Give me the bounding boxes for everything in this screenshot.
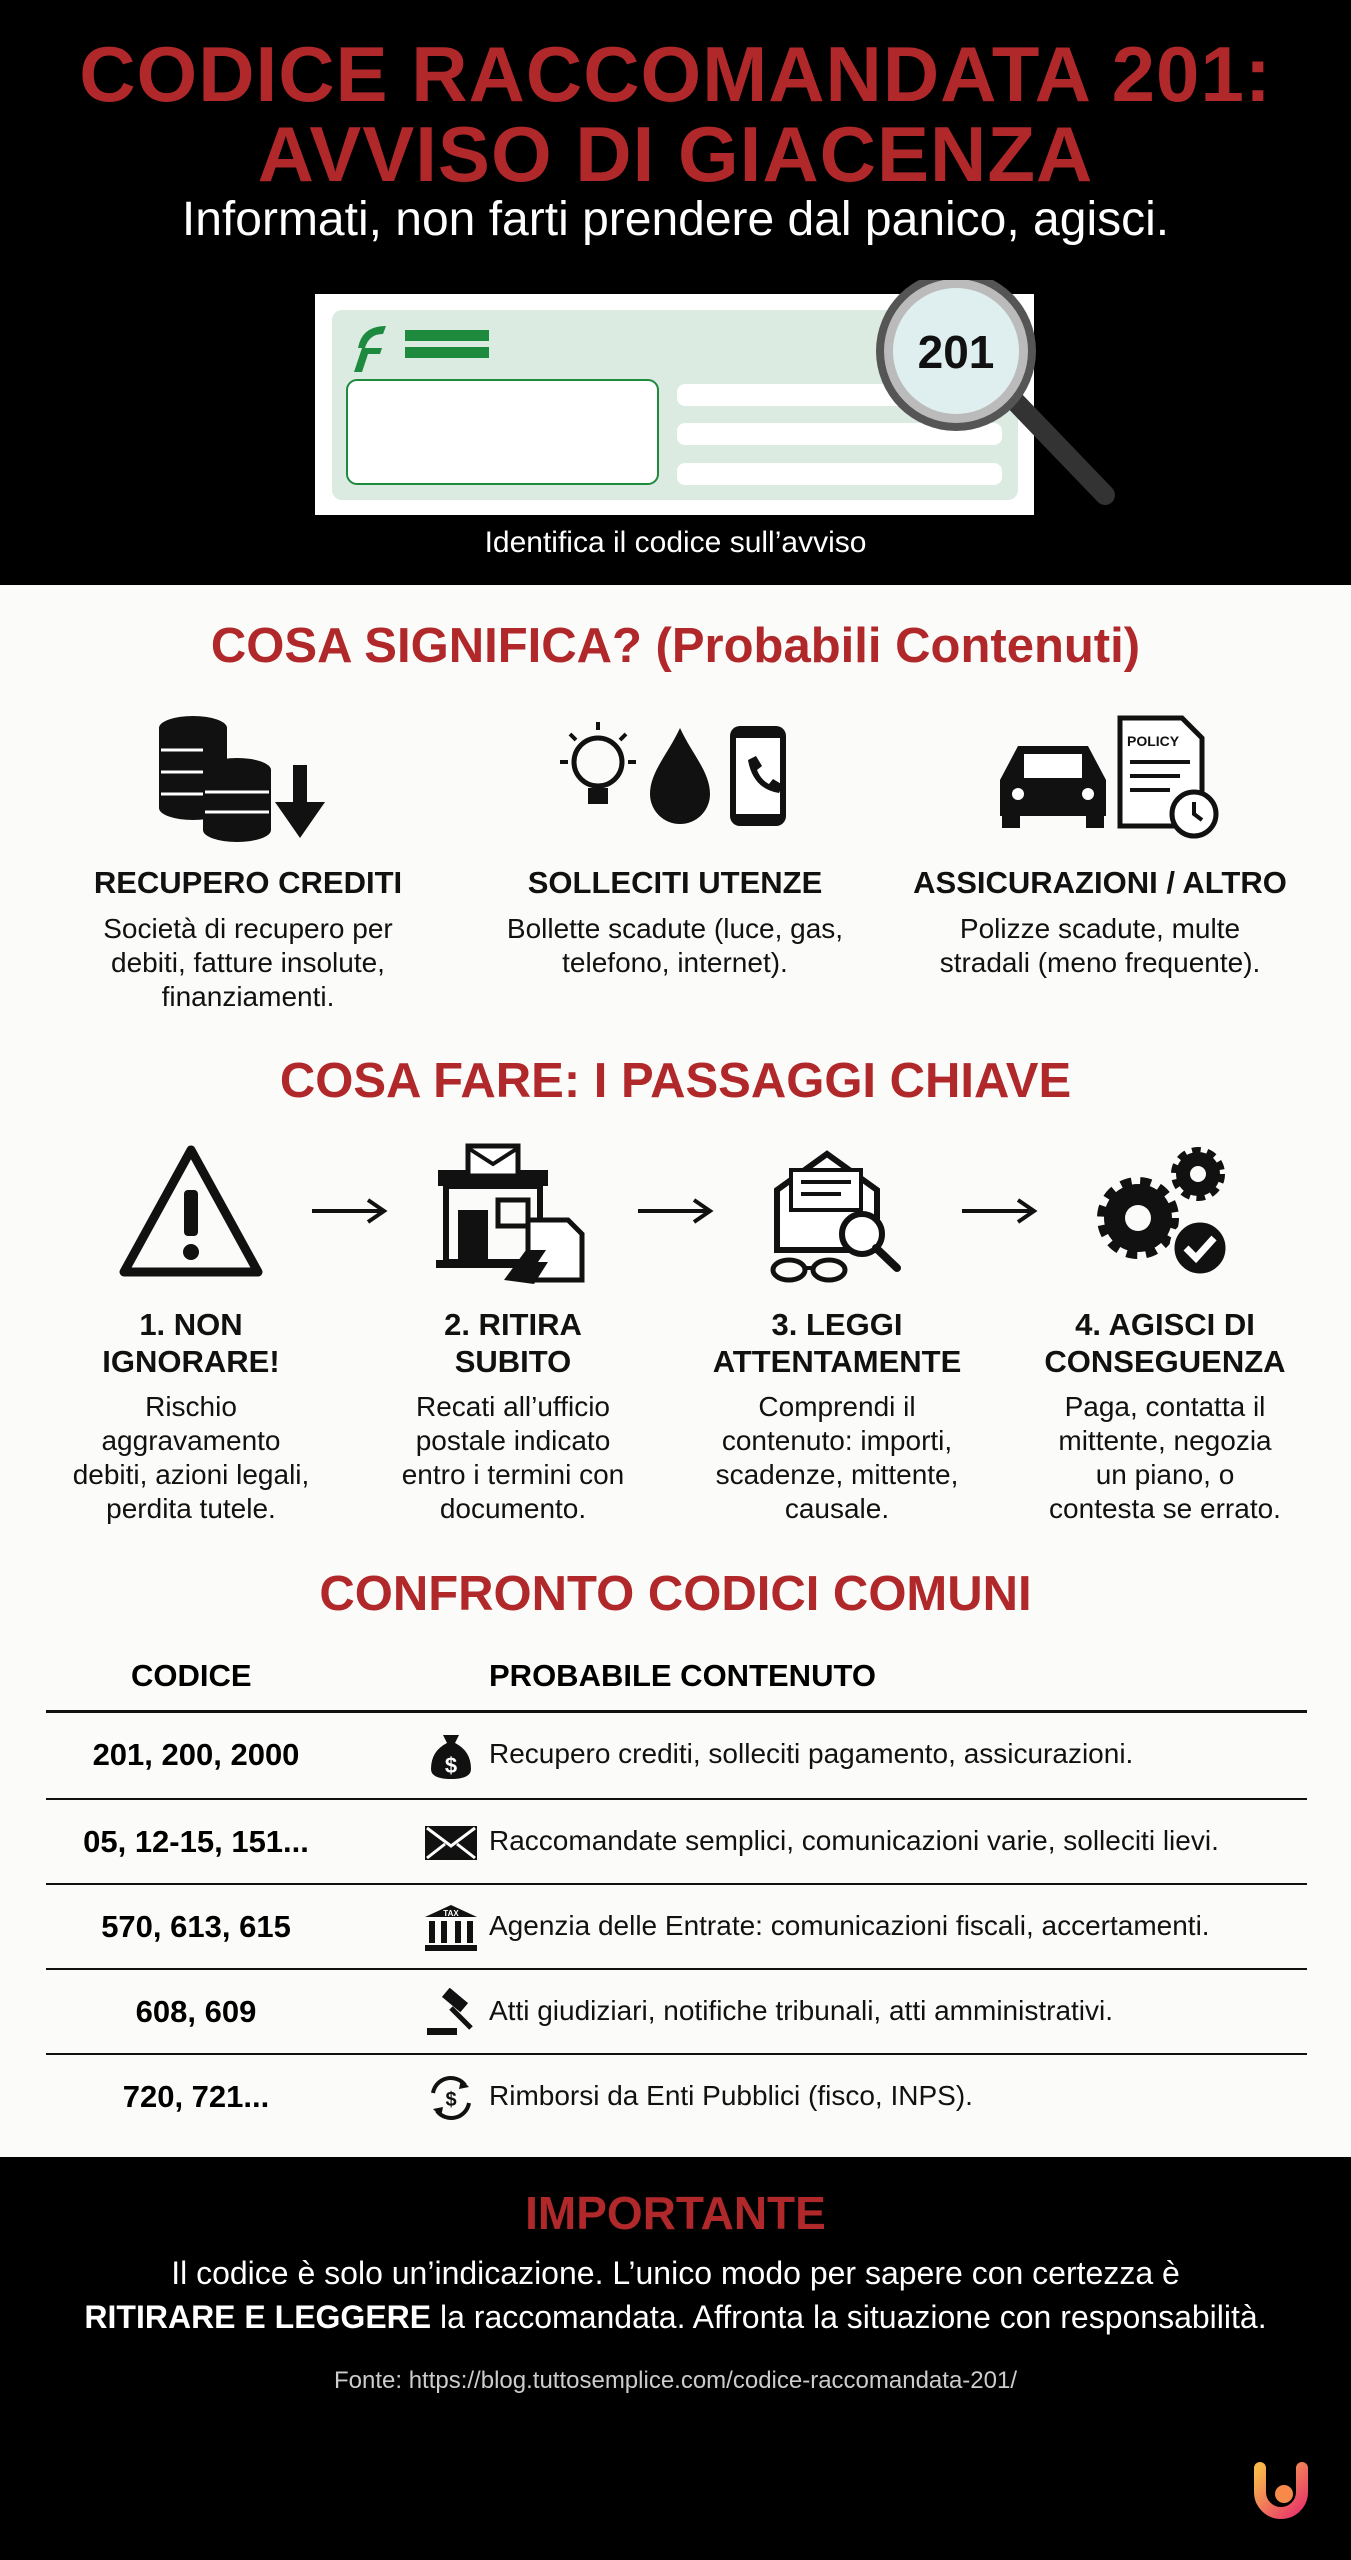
- icon: bulb drop phone: [560, 722, 786, 826]
- description: Società di recupero per: [103, 913, 393, 944]
- description: telefono, internet).: [562, 947, 788, 978]
- step 4: [1044, 1147, 1286, 1524]
- step 3: [713, 1150, 961, 1524]
- description: [103, 913, 393, 1012]
- icon: coins: [159, 716, 325, 842]
- heading: SOLLECITI UTENZE: [528, 865, 822, 900]
- heading: importante: IMPORTANTE: [525, 2187, 826, 2239]
- description: scadenze, mittente,: [716, 1459, 958, 1490]
- row 3: Agenzia delle Entrate: comunicazioni fiscali, accertamenti.: [489, 1910, 1210, 1941]
- caption: Identifica il codice sull’avviso: [485, 526, 866, 559]
- description: contenuto: importi,: [722, 1425, 952, 1456]
- description: Polizze scadute, multe: [960, 913, 1240, 944]
- row 3: 570, 613, 615: [101, 1909, 291, 1944]
- row 4: 608, 609: [136, 1994, 256, 2029]
- icon: gears check: [1097, 1147, 1226, 1274]
- description: Comprendi il: [758, 1391, 916, 1422]
- description: postale indicato: [416, 1425, 610, 1456]
- description: documento.: [440, 1493, 586, 1524]
- title: 1. NON: [139, 1307, 243, 1342]
- row 2: [46, 1798, 1307, 1883]
- heading: RECUPERO CREDITI: [94, 865, 402, 900]
- title: [79, 30, 1272, 198]
- description: finanziamenti.: [162, 981, 334, 1012]
- important text: Il codice è solo un’indicazione. L’unico modo per sapere con certezza è: [171, 2255, 1180, 2291]
- source: Fonte: https://blog.tuttosemplice.com/codice-raccomandata-201/: [334, 2367, 1017, 2394]
- row 2: 05, 12-15, 151...: [83, 1824, 309, 1859]
- row 3: TAX: [443, 1909, 459, 1918]
- title: CONSEGUENZA: [1044, 1344, 1286, 1379]
- illustration: notice card with magnifier: 201: [918, 326, 994, 378]
- title: [102, 1307, 280, 1379]
- heading: cosa fare: COSA FARE: I PASSAGGI CHIAVE: [280, 1054, 1071, 1108]
- row 1: $: [445, 1753, 457, 1778]
- table: [46, 1658, 1307, 2120]
- step 2: [402, 1144, 624, 1524]
- title: IGNORARE!: [102, 1344, 280, 1379]
- description: causale.: [785, 1493, 889, 1524]
- logo: [1254, 2462, 1308, 2519]
- description: Bollette scadute (luce, gas,: [507, 913, 843, 944]
- icon: post office: [436, 1144, 584, 1284]
- arrow: [312, 1198, 388, 1224]
- row 2: Raccomandate semplici, comunicazioni varie, solleciti lievi.: [489, 1825, 1219, 1856]
- row 1: 201, 200, 2000: [93, 1737, 299, 1772]
- arrow: [638, 1198, 714, 1224]
- description: [73, 1391, 309, 1524]
- title: 4. AGISCI DI: [1075, 1307, 1255, 1342]
- row 5: Rimborsi da Enti Pubblici (fisco, INPS).: [489, 2080, 973, 2111]
- subtitle: Informati, non farti prendere dal panico, agisci.: [182, 193, 1169, 246]
- title: ATTENTAMENTE: [713, 1344, 961, 1379]
- description: aggravamento: [101, 1425, 280, 1456]
- icon: warning: [120, 1146, 262, 1276]
- title: [444, 1307, 582, 1379]
- title: [713, 1307, 961, 1379]
- arrow: [962, 1198, 1038, 1224]
- description: debiti, fatture insolute,: [111, 947, 385, 978]
- description: stradali (meno frequente).: [940, 947, 1260, 978]
- title: 3. LEGGI: [772, 1307, 902, 1342]
- description: Paga, contatta il: [1065, 1391, 1265, 1422]
- panel: recupero crediti: [94, 716, 402, 1012]
- title: [1044, 1307, 1286, 1379]
- row 1: Recupero crediti, solleciti pagamento, assicurazioni.: [489, 1738, 1133, 1769]
- heading: ASSICURAZIONI / ALTRO: [913, 865, 1287, 900]
- table header: [131, 1658, 876, 1693]
- description: [402, 1391, 624, 1524]
- description: mittente, negozia: [1058, 1425, 1272, 1456]
- important text: RITIRARE E LEGGERE la raccomandata. Affronta la situazione con responsabilità.: [84, 2299, 1267, 2335]
- header panel: [0, 0, 1351, 585]
- heading: cosa significa: COSA SIGNIFICA? (Probabili Contenuti): [211, 619, 1140, 673]
- magnifier: [1010, 396, 1105, 495]
- description: [940, 913, 1260, 978]
- table header: PROBABILE CONTENUTO: [489, 1658, 876, 1693]
- important text: [84, 2255, 1267, 2335]
- icon: envelope magnifier glasses: [770, 1150, 901, 1282]
- row 1: [93, 1735, 1133, 1779]
- description: entro i termini con: [402, 1459, 624, 1490]
- panel: assicurazioni: [913, 716, 1287, 978]
- panel: solleciti utenze: [507, 722, 843, 978]
- description: contesta se errato.: [1049, 1493, 1281, 1524]
- description: [716, 1391, 958, 1524]
- description: debiti, azioni legali,: [73, 1459, 309, 1490]
- description: [1049, 1391, 1281, 1524]
- row 5: $: [445, 2089, 457, 2111]
- step 1: [73, 1146, 309, 1524]
- row 5: 720, 721...: [123, 2079, 269, 2114]
- description: un piano, o: [1096, 1459, 1234, 1490]
- heading: confronto: CONFRONTO CODICI COMUNI: [319, 1567, 1032, 1621]
- illustration: notice card with magnifier: [315, 280, 1115, 515]
- description: Rischio: [145, 1391, 237, 1422]
- row 4: [46, 1968, 1307, 2053]
- row 3: [46, 1883, 1307, 1968]
- row 4: Atti giudiziari, notifiche tribunali, atti amministrativi.: [489, 1995, 1113, 2026]
- description: perdita tutele.: [106, 1493, 276, 1524]
- footer panel: [0, 2157, 1351, 2560]
- description: [507, 913, 843, 978]
- title: CODICE RACCOMANDATA 201:: [79, 30, 1272, 118]
- title: 2. RITIRA: [444, 1307, 582, 1342]
- row 5: [46, 2053, 1307, 2138]
- icon: car and policy: [1000, 716, 1218, 838]
- table header: CODICE: [131, 1658, 252, 1693]
- description: Recati all’ufficio: [416, 1391, 610, 1422]
- icon: car and policy: POLICY: [1127, 733, 1180, 749]
- title: SUBITO: [455, 1344, 571, 1379]
- title: AVVISO DI GIACENZA: [258, 110, 1093, 198]
